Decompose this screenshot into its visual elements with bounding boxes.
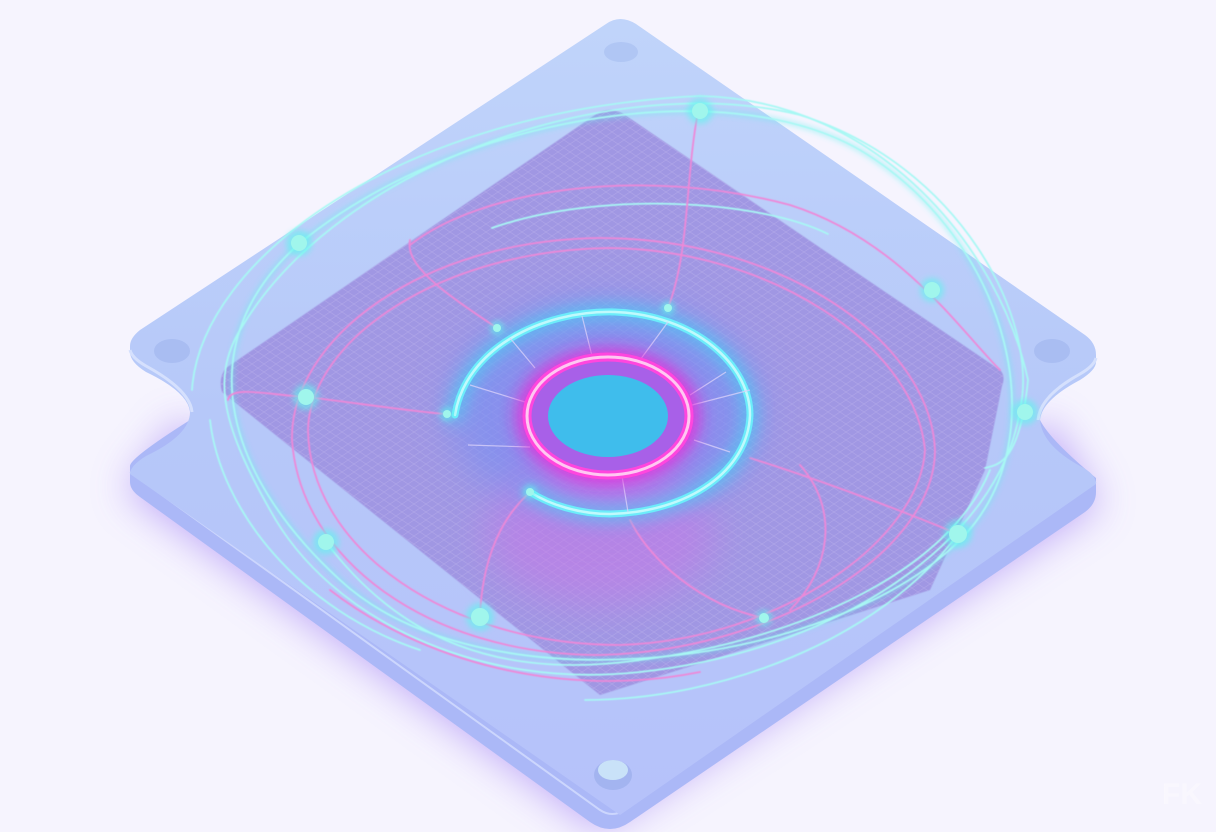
lower plate (130, 420, 1096, 829)
plate shadow (125, 420, 1100, 832)
upper plate edge highlight (130, 350, 1096, 420)
central hub (516, 348, 700, 484)
corner screw holes (154, 42, 1070, 790)
blue halo around ring (450, 298, 760, 522)
radial spokes (468, 316, 750, 512)
pink orbit wires (228, 112, 1000, 681)
glowing nodes (286, 98, 1038, 631)
upper plate (130, 19, 1096, 815)
watermark: FK (1162, 778, 1202, 811)
outer cyan orbit wires (192, 96, 1028, 700)
central cyan ring (455, 312, 750, 514)
core glow (485, 330, 735, 520)
mesh panel (221, 110, 1004, 695)
